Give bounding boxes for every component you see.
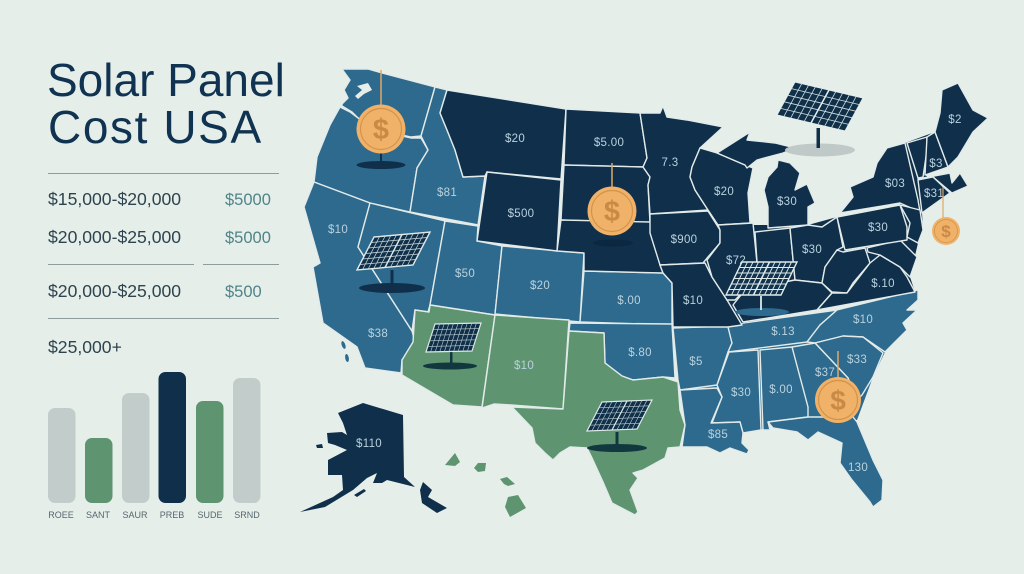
solar panel: west xyxy=(357,232,430,293)
row: $15,000-$20,000 xyxy=(48,189,271,209)
Puget Sound xyxy=(355,83,372,99)
cost labels on states: $500 xyxy=(508,208,534,220)
bar: SANT xyxy=(85,438,112,520)
cost labels on states: $5.00 xyxy=(594,137,624,149)
cost labels on states: $2 xyxy=(948,114,962,126)
coin: Washington: $ xyxy=(373,114,389,146)
title xyxy=(47,54,285,153)
cost labels on states: $30 xyxy=(868,222,888,234)
cost labels on states: $20 xyxy=(714,186,734,198)
bar: PREB xyxy=(158,372,186,520)
row: $20,000-$25,000 xyxy=(48,227,271,247)
solar panel: midwest xyxy=(726,262,797,316)
bar: SUDE xyxy=(196,401,224,520)
map: Hawaii xyxy=(445,453,526,517)
cost labels on states: $37 xyxy=(815,367,835,379)
title: Solar Panel xyxy=(47,54,285,106)
map: dark states xyxy=(440,83,988,327)
coin: South Dakota xyxy=(588,163,636,246)
cost labels on states: $33 xyxy=(847,354,867,366)
map underlay: south block xyxy=(680,310,905,430)
row: $20,000-$25,000: $20,000-$25,000 xyxy=(48,227,181,247)
row: $25,000+: $25,000+ xyxy=(48,337,122,357)
cost labels on states: $81 xyxy=(437,187,457,199)
California islands xyxy=(340,341,349,362)
row: $15,000-$20,000: $15,000-$20,000 xyxy=(48,189,181,209)
cost labels on states: $30 xyxy=(731,387,751,399)
cost labels on states: $31 xyxy=(924,188,944,200)
cost labels on states: $.00 xyxy=(617,295,641,307)
cost labels on states: $20 xyxy=(505,133,525,145)
cost labels on states: $30 xyxy=(802,244,822,256)
price table xyxy=(48,174,279,357)
title: Cost USA xyxy=(48,101,263,153)
cost labels on states: $85 xyxy=(708,429,728,441)
cost labels on states xyxy=(328,114,962,474)
cost labels on states: 130 xyxy=(848,462,868,474)
map: Alaska xyxy=(300,403,447,513)
map: green states xyxy=(402,305,685,515)
solar panel: Texas xyxy=(587,400,652,452)
cost labels on states: $3 xyxy=(929,158,943,170)
coin: Georgia xyxy=(815,351,861,423)
cost labels on states: $10 xyxy=(514,360,534,372)
coin: Washington xyxy=(356,70,406,169)
row: $20,000-$25,000 second: $500 xyxy=(225,283,262,301)
bar: SRND: SRND xyxy=(234,510,260,520)
cost labels on states: $10 xyxy=(853,314,873,326)
cost labels on states: $72 xyxy=(726,255,746,267)
cost labels on states: $.10 xyxy=(871,278,895,290)
bar: ROEE xyxy=(48,408,76,520)
cost labels on states: $38 xyxy=(368,328,388,340)
cost labels on states: $50 xyxy=(455,268,475,280)
cost labels on states: $.80 xyxy=(628,347,652,359)
coin: Georgia: $ xyxy=(830,385,846,416)
bar: SANT: SANT xyxy=(86,510,110,520)
solar panel: top right xyxy=(777,82,863,156)
bar: SAUR: SAUR xyxy=(122,510,148,520)
row: $20,000-$25,000 second xyxy=(48,281,262,301)
row: $20,000-$25,000 second: $20,000-$25,000 xyxy=(48,281,181,301)
map: blue states xyxy=(304,69,918,507)
cost labels on states: $900 xyxy=(671,234,697,246)
cost labels on states: $10 xyxy=(683,295,703,307)
solar panel: Arizona xyxy=(423,323,481,370)
cost labels on states: $5 xyxy=(689,356,703,368)
cost labels on states: 7.3 xyxy=(662,157,678,169)
cost labels on states: $30 xyxy=(777,196,797,208)
coin: New England: $ xyxy=(941,222,951,241)
bar: PREB: PREB xyxy=(160,510,184,520)
row: $20,000-$25,000: $5000 xyxy=(225,229,271,247)
cost labels on states: $20 xyxy=(530,280,550,292)
cost labels on states: $03 xyxy=(885,178,905,190)
cost labels on states: $.00 xyxy=(769,384,793,396)
bar chart xyxy=(48,372,260,520)
cost labels on states: $.13 xyxy=(771,326,795,338)
bar: SRND xyxy=(233,378,260,520)
map underlay: east block xyxy=(650,132,950,327)
bar: SUDE: SUDE xyxy=(197,510,223,520)
bar: ROEE: ROEE xyxy=(48,510,74,520)
cost labels on states: $110 xyxy=(356,438,382,450)
row: $15,000-$20,000: $5000 xyxy=(225,191,271,209)
coin: South Dakota: $ xyxy=(604,196,620,228)
coin: New England xyxy=(932,187,960,245)
bar: SAUR xyxy=(122,393,150,520)
cost labels on states: $10 xyxy=(328,224,348,236)
